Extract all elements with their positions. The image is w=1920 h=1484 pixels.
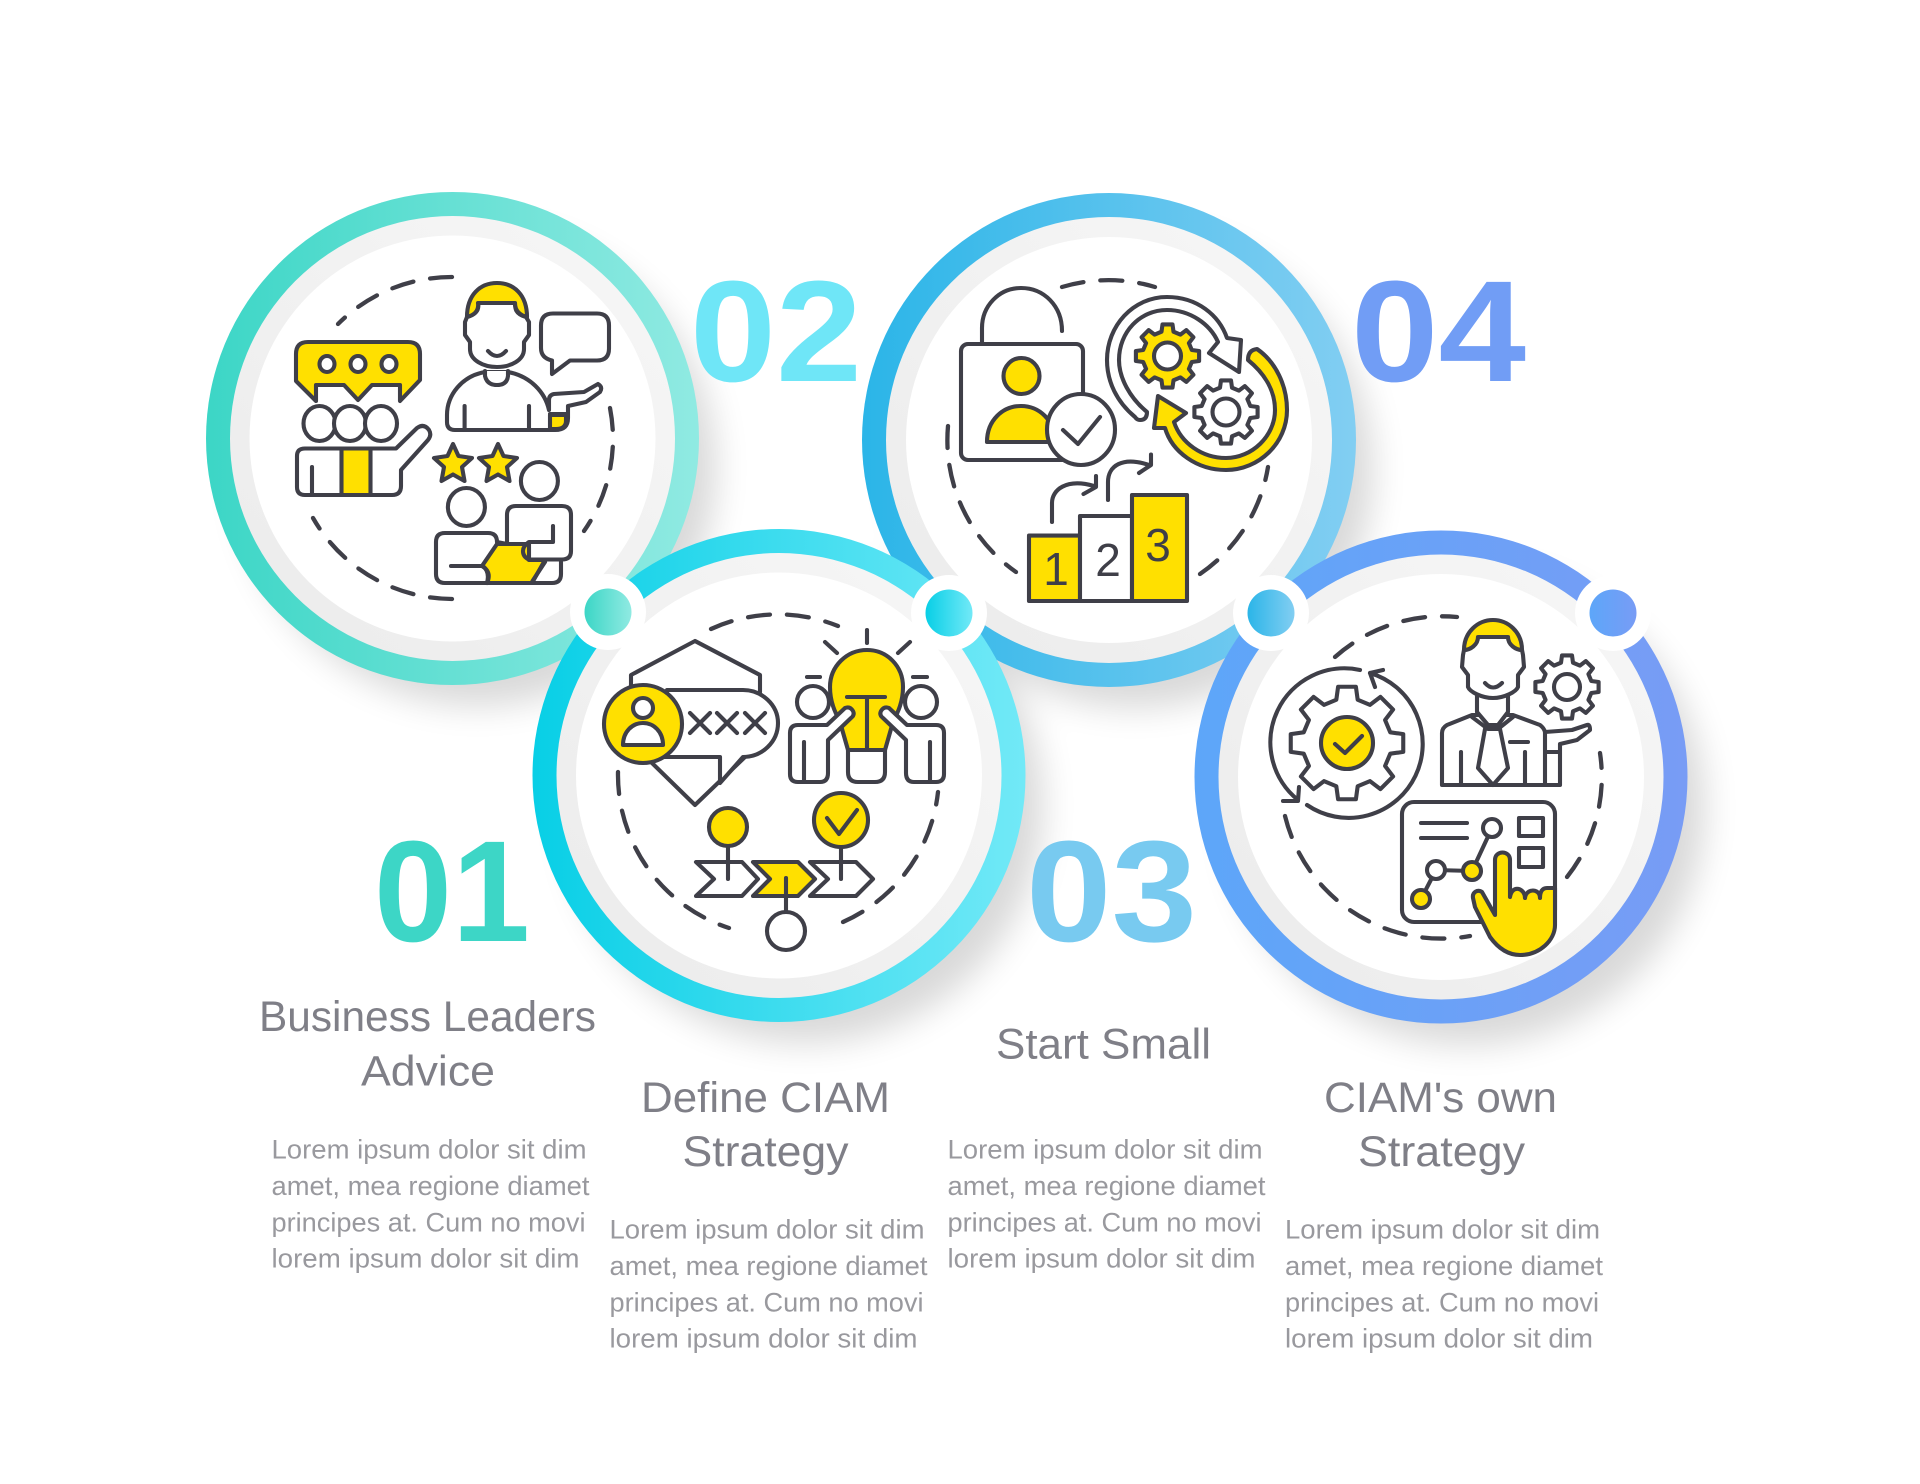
dashed orbit: step 2 [618, 614, 938, 928]
heading: Define CIAM Strategy: Strategy [682, 1128, 849, 1176]
panel: step 2 circle [532, 529, 1026, 1022]
heading: Define CIAM Strategy [641, 1074, 890, 1176]
icon: dashboard with pointing hand [1402, 802, 1555, 955]
panel: step 3 circle [862, 193, 1356, 687]
number 01: 01 [374, 811, 530, 972]
panel: step 4 circle [1194, 530, 1688, 1024]
heading: Business Leaders Advice: Advice [361, 1048, 495, 1096]
ring: step 3 [862, 193, 1356, 687]
panel: step 1 circle [206, 192, 699, 685]
icon: rotating gears [1107, 297, 1287, 470]
number 03: 03 [1026, 811, 1197, 972]
icon: team with light bulb [790, 630, 944, 782]
heading: Business Leaders Advice [259, 993, 596, 1096]
drop shadows [240, 230, 1705, 1045]
text block: step 1 description: lorem ipsum dolor sit dim [272, 1244, 580, 1274]
text block: step 3 description: principes at. Cum no movi [948, 1208, 1262, 1238]
dashed orbit: step 3 [947, 280, 1268, 574]
text block: step 4 description: amet, mea regione diamet [1285, 1251, 1603, 1281]
text block: step 1 description: principes at. Cum no movi [272, 1208, 586, 1238]
dashed orbit: step 1 [313, 277, 613, 599]
connector dot: step 3 [1233, 575, 1309, 651]
text block: step 2 description: Lorem ipsum dolor sit dim [610, 1214, 924, 1244]
text block: step 4 description [1285, 1214, 1603, 1354]
text block: step 4 description: principes at. Cum no movi [1285, 1288, 1599, 1318]
number 04: 04 [1351, 251, 1526, 412]
text block: step 2 description: amet, mea regione diamet [610, 1251, 928, 1281]
heading: CIAM's own Strategy [1324, 1074, 1557, 1176]
text block: step 2 description: lorem ipsum dolor sit dim [610, 1324, 918, 1354]
text block: step 3 description: Lorem ipsum dolor sit dim [948, 1134, 1262, 1164]
icon: cycling gear with check [1270, 668, 1423, 818]
text block: step 1 description [272, 1134, 590, 1274]
text block: step 3 description: amet, mea regione diamet [948, 1171, 1266, 1201]
text block: step 3 description [948, 1134, 1266, 1274]
connector dot: step 4 [1575, 575, 1651, 651]
text block: step 3 description: lorem ipsum dolor sit dim [948, 1244, 1256, 1274]
connector dot: step 1 [570, 574, 646, 650]
heading: Business Leaders Advice: Business Leaders [259, 993, 596, 1041]
icon: growth podium [1029, 454, 1187, 601]
icon: rating stars [434, 444, 517, 481]
connector dot: step 2 [911, 575, 987, 651]
text block: step 1 description: Lorem ipsum dolor sit dim [272, 1134, 586, 1164]
text block: step 2 description [610, 1214, 928, 1354]
ring: step 4 [1194, 530, 1688, 1024]
dashed orbit: step 4 [1285, 616, 1602, 939]
icon: growth podium: 2 [1095, 534, 1121, 586]
ring: step 1 [206, 192, 699, 685]
icon: identity padlock [961, 288, 1115, 465]
icon: speaker person [447, 283, 609, 430]
icon: envelope with password bubble [604, 641, 778, 805]
heading: Start Small: Start Small [996, 1020, 1211, 1068]
heading: CIAM's own Strategy: Strategy [1358, 1128, 1526, 1176]
icon: two people at a desk [436, 462, 571, 583]
icon: roadmap chevrons [696, 793, 873, 950]
heading: Define CIAM Strategy: Define CIAM [641, 1074, 890, 1122]
text block: step 4 description: Lorem ipsum dolor sit dim [1285, 1214, 1600, 1244]
heading: CIAM's own Strategy: CIAM's own [1324, 1074, 1557, 1122]
icon: growth podium: 3 [1145, 519, 1171, 571]
icon: speech bubble with audience [296, 342, 430, 495]
number 02: 02 [690, 251, 862, 412]
text block: step 4 description: lorem ipsum dolor sit dim [1285, 1324, 1593, 1354]
ring: step 2 [532, 529, 1026, 1022]
icon: manager with gear [1442, 620, 1599, 785]
text block: step 2 description: principes at. Cum no movi [610, 1288, 924, 1318]
text block: step 1 description: amet, mea regione diamet [272, 1171, 590, 1201]
icon: growth podium: 1 [1043, 543, 1069, 595]
